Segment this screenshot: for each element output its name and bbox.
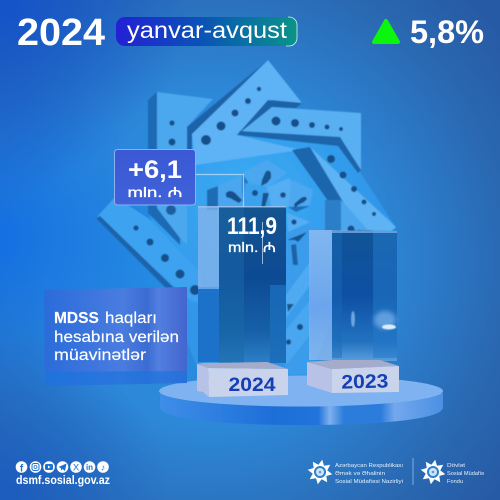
heading: period pill: yanvar-avqust [127,17,288,43]
callout: +6,1 mln [114,150,196,205]
band: top diagonal [187,60,302,165]
pedestal: 2024 [197,362,288,397]
fund name: Fondu [447,479,463,485]
change value: 5,8% [410,14,484,50]
year label 2023: 2023 [341,370,389,394]
social icons [16,461,109,474]
social icons: f [20,464,24,474]
value: 111,9 mln: 111,9 [227,213,277,240]
star ornament [96,60,396,375]
fund name: Sosial Müdafiə [447,471,484,477]
band: lower right between bars [285,225,311,375]
logo: ministry emblem [308,460,332,484]
panel text: hesabına verilən [54,329,179,346]
callout unit: mln. ₼ [128,184,182,200]
logo: fund emblem [421,460,445,484]
band: left vertical [148,92,213,245]
platform [159,376,443,425]
bar: 2023 [309,230,397,361]
fund name: Dövlət [447,463,466,469]
website: dsmf.sosial.gov.az [16,473,110,487]
panel text: MDSS [54,310,99,327]
band: lower left diagonal [96,197,205,305]
ministry name: Əmək və Əhalinin [335,471,385,477]
social icons: ♪ [101,462,105,472]
social icons: X [73,462,80,474]
social icons: in [86,463,93,472]
logo divider [412,458,414,485]
panel: description [44,287,187,386]
band: right diagonal [292,147,396,232]
year label 2024: 2024 [228,374,276,396]
band: top right [237,107,361,173]
panel text: müavinətlər [54,347,146,364]
value: 111,9 mln: mln. ₼ [228,239,276,255]
callout value: +6,1 [128,156,182,184]
bar: 2024 [198,206,286,363]
ministry name: Sosial Müdafiəsi Nazirliyi [335,479,403,485]
value: 111,9 mln [227,213,277,255]
icon: green up arrow [374,21,398,42]
connector line [196,174,244,207]
pedestal: 2023 [307,360,399,394]
emblem: central tree [207,160,313,265]
heading: year: 2024 [17,12,105,54]
ministry name: Azərbaycan Respublikası [335,463,403,469]
panel text: haqları [105,310,157,327]
